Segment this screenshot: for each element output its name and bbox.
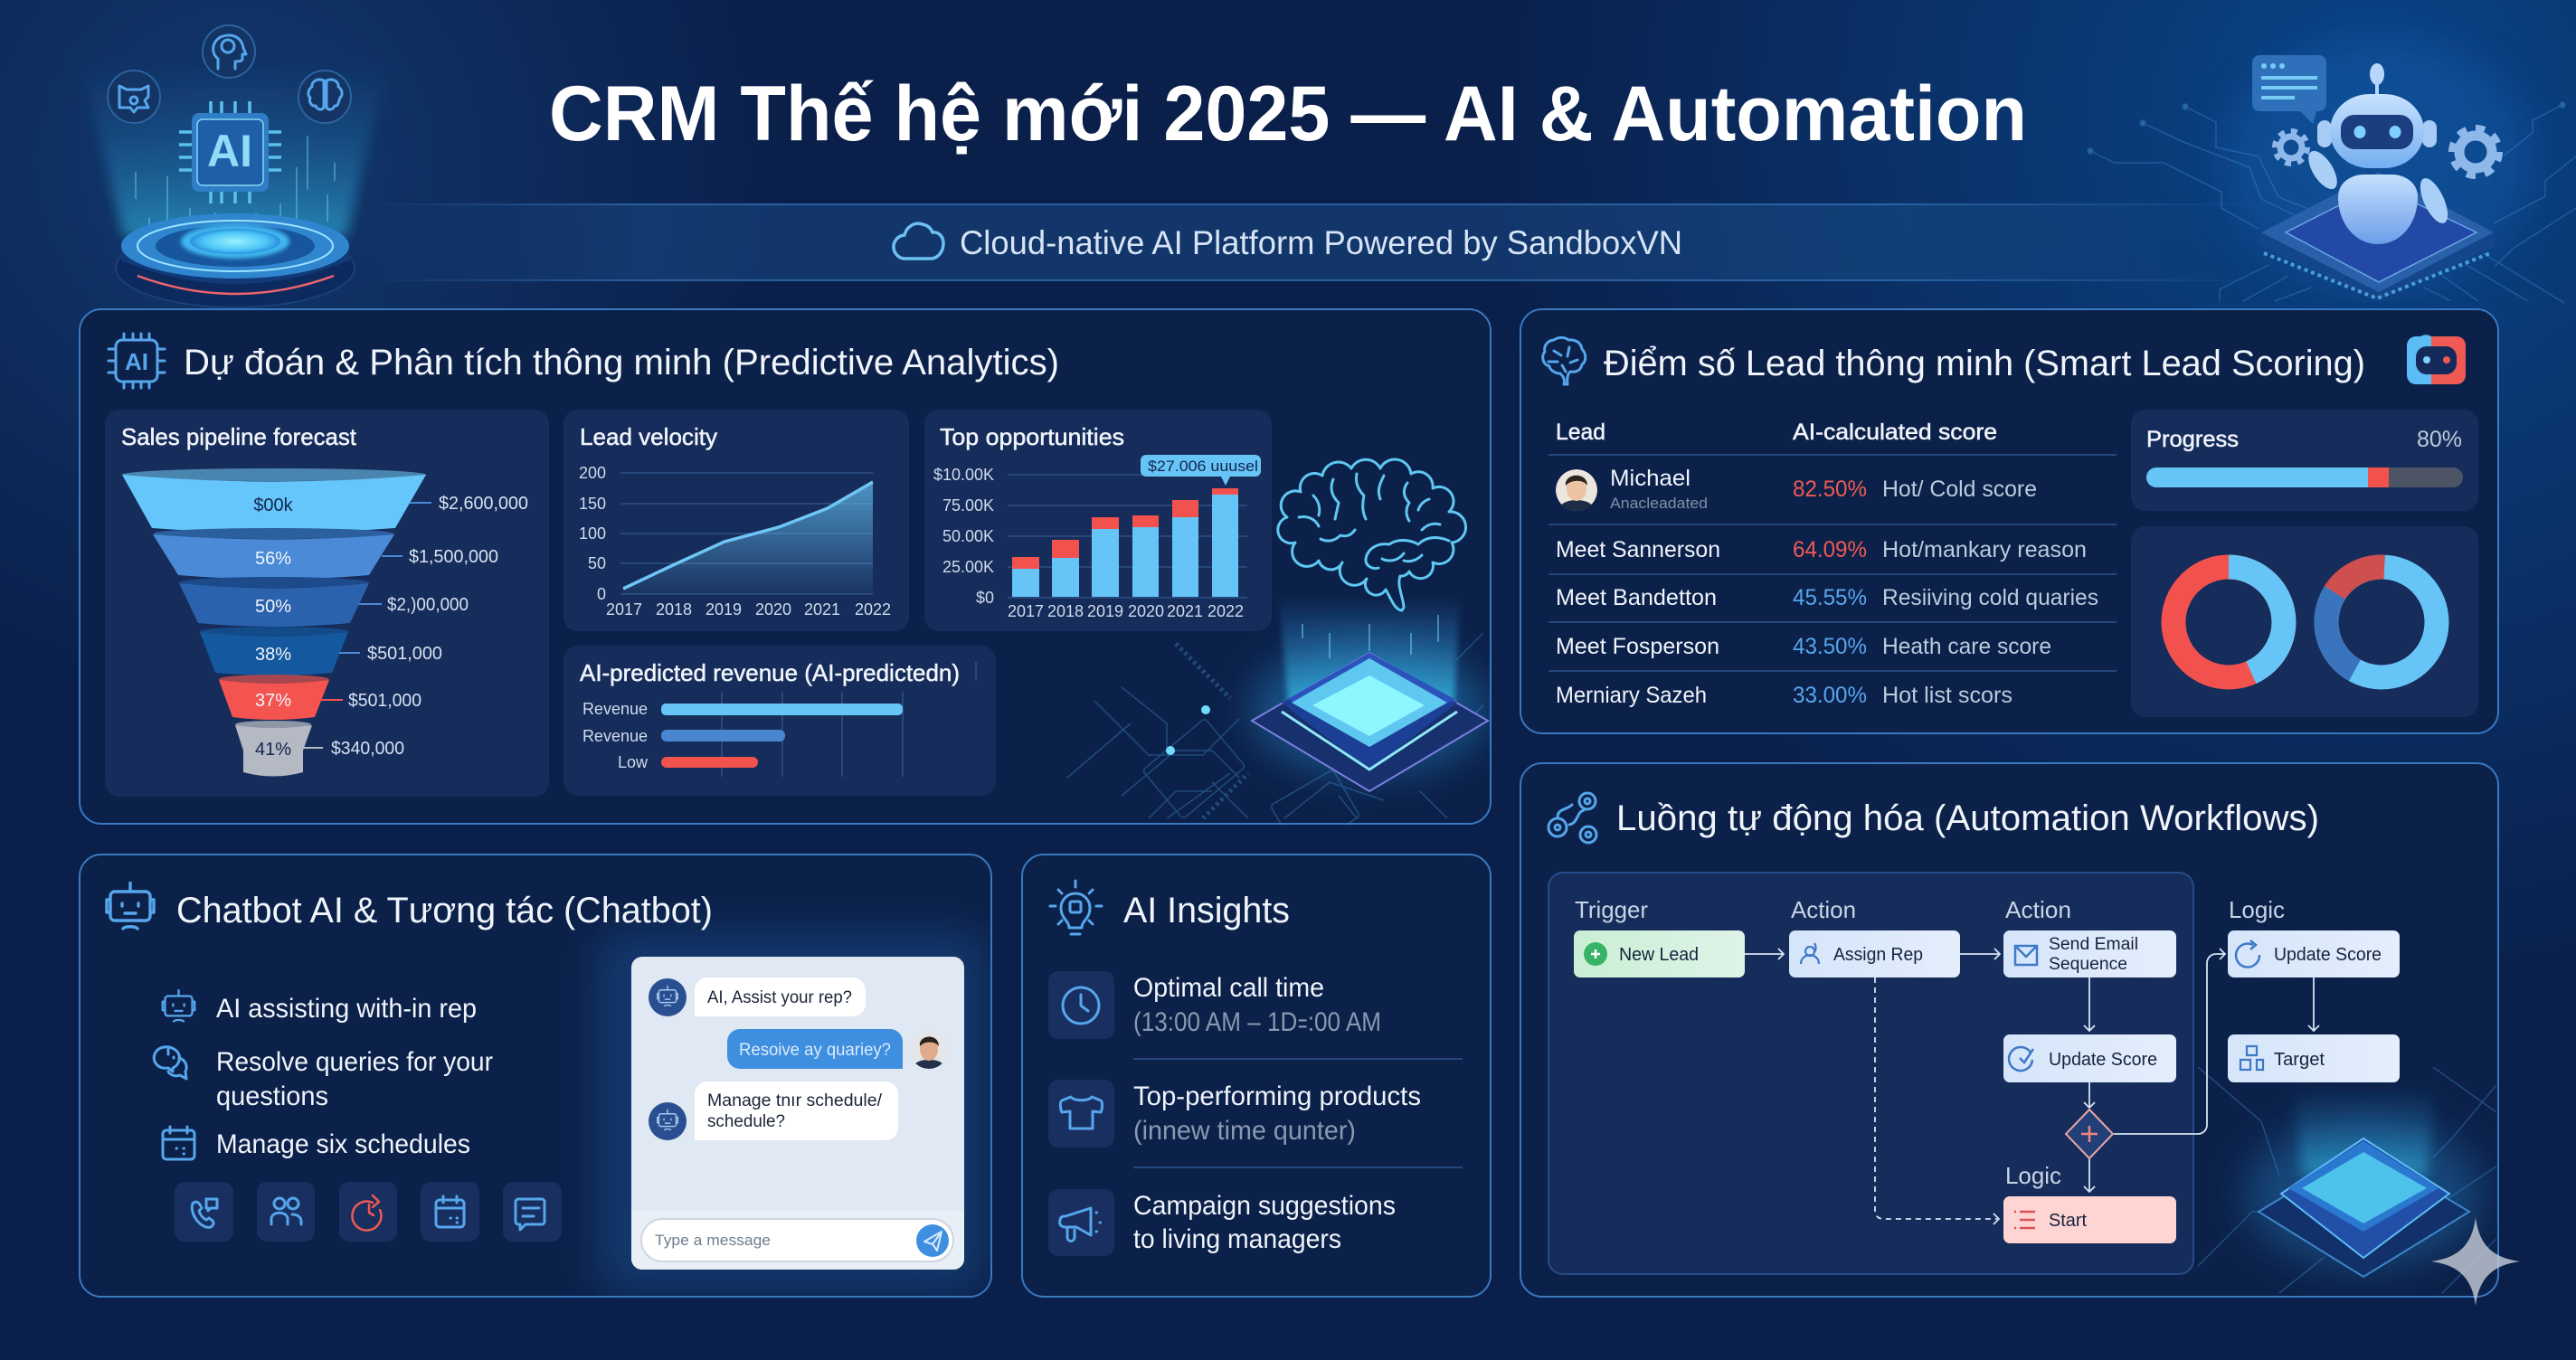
chart: lead velocity: 100 xyxy=(579,524,606,543)
node: send email sequence xyxy=(2003,930,2176,978)
illustration: AI chip hologram xyxy=(81,25,387,307)
node: update score: Update Score xyxy=(2049,1050,2157,1070)
progress card: 80% xyxy=(2417,427,2462,452)
insight: optimal call time: Optimal call time xyxy=(1133,973,1324,1003)
chart: top opportunities: $10.00K xyxy=(933,466,994,484)
heading xyxy=(1050,881,1290,934)
progress card: Progress xyxy=(2146,427,2239,452)
chart: sales pipeline funnel: 50% xyxy=(255,597,291,617)
avatar xyxy=(1556,469,1597,512)
decision diamond xyxy=(2066,1110,2113,1158)
chart: sales pipeline funnel: $340,000 xyxy=(331,739,404,759)
table: lead scores: Meet Fosperson xyxy=(1556,634,1719,659)
feature list: questions xyxy=(216,1081,328,1111)
chart: top opportunities: 2022 xyxy=(1208,602,1244,620)
platform base xyxy=(116,213,355,307)
heading: AI Insights xyxy=(1123,891,1290,930)
subtitle: Cloud-native AI Platform Powered by SandboxVN xyxy=(960,224,1682,261)
insight: campaign suggestions: Campaign suggestions xyxy=(1133,1191,1396,1221)
table: lead scores: Anacleadated xyxy=(1610,495,1708,512)
chart: sales pipeline funnel: 56% xyxy=(255,549,291,569)
table: lead scores: Meet Bandetton xyxy=(1556,585,1717,610)
icon: gears xyxy=(1548,793,1596,843)
node: assign rep xyxy=(1789,930,1960,978)
icon: cloud xyxy=(894,223,943,259)
table: lead scores: Hot/ Cold score xyxy=(1882,477,2037,502)
chart: lead velocity: 2022 xyxy=(855,600,891,619)
donut charts xyxy=(2131,526,2478,717)
node: new lead xyxy=(1574,930,1745,978)
chart: top opportunities: 50.00K xyxy=(942,527,994,545)
node: target: Target xyxy=(2274,1050,2325,1070)
table: lead scores xyxy=(1548,420,2117,708)
table: lead scores: Merniary Sazeh xyxy=(1556,683,1707,708)
chart: AI-predicted revenue xyxy=(564,646,996,796)
chart: sales pipeline funnel xyxy=(105,410,549,797)
node: start: Start xyxy=(2049,1211,2087,1231)
chart: sales pipeline funnel: $501,000 xyxy=(367,644,442,664)
chart: lead velocity: 2020 xyxy=(755,600,791,619)
table: lead scores: 45.55% xyxy=(1793,585,1867,610)
flow diagram: Action xyxy=(2005,896,2071,923)
icon row xyxy=(175,1182,562,1242)
chart: lead velocity: 0 xyxy=(597,585,606,603)
table: lead scores: Resiiving cold quaries xyxy=(1882,585,2098,610)
feature list xyxy=(154,990,493,1159)
chart: top opportunities: 25.00K xyxy=(942,558,994,576)
node: assign rep: Assign Rep xyxy=(1833,945,1923,965)
node: send email sequence: Send Email xyxy=(2049,935,2138,954)
workflow canvas xyxy=(1548,873,2193,1274)
table: lead scores: Hot list scors xyxy=(1882,683,2012,708)
heading: Dự đoán & Phân tích thông minh (Predictive Analytics) xyxy=(184,343,1059,382)
feature list: Manage six schedules xyxy=(216,1129,470,1159)
chart: sales pipeline funnel: $1,500,000 xyxy=(409,547,498,567)
insight: top-performing products: Top-performing products xyxy=(1133,1081,1421,1111)
bot message: schedule? xyxy=(707,1112,785,1131)
table: lead scores: Heath care score xyxy=(1882,634,2051,659)
chart: lead velocity xyxy=(564,410,909,631)
flow diagram: Action xyxy=(1791,896,1856,923)
chart: AI-predicted revenue: Revenue xyxy=(582,727,648,745)
chart: lead velocity: 200 xyxy=(579,464,606,482)
table: lead scores: AI-calculated score xyxy=(1793,420,1997,445)
icon: AI chip: AI xyxy=(125,348,148,375)
chart: top opportunities: Top opportunities xyxy=(940,423,1124,450)
chart: top opportunities: 75.00K xyxy=(942,496,994,515)
donut: right xyxy=(2326,567,2437,677)
icon: head badge xyxy=(203,25,255,78)
icon: light bulb xyxy=(1050,881,1102,934)
node: update score logic xyxy=(2228,930,2400,978)
table: lead scores: 33.00% xyxy=(1793,683,1867,708)
chart: lead velocity: Lead velocity xyxy=(580,423,717,450)
donut: left xyxy=(2174,567,2284,677)
title: CRM Thế hệ mới 2025 — AI & Automation xyxy=(549,71,2027,157)
heading: Điểm số Lead thông minh (Smart Lead Scoring) xyxy=(1604,344,2365,383)
table: lead scores: Hot/mankary reason xyxy=(1882,537,2087,562)
circuit traces xyxy=(2088,102,2576,303)
user message: Resoive ay quariey? xyxy=(739,1041,891,1060)
chart: top opportunities: 2020 xyxy=(1128,602,1164,620)
icon: brain xyxy=(1543,337,1586,384)
icon: sparkle watermark xyxy=(2431,1217,2520,1306)
arrows xyxy=(1745,949,2319,1224)
chart: top opportunities: 2021 xyxy=(1167,602,1203,620)
bot message xyxy=(649,1081,898,1140)
table: lead scores: 64.09% xyxy=(1793,537,1867,562)
table: lead scores: 82.50% xyxy=(1793,477,1867,502)
chart: lead velocity: 2018 xyxy=(656,600,692,619)
icon: question bubbles xyxy=(154,1047,186,1079)
insight: campaign suggestions xyxy=(1048,1189,1396,1256)
insight: campaign suggestions: to living managers xyxy=(1133,1224,1341,1254)
chart: sales pipeline funnel: $2,)00,000 xyxy=(387,595,469,615)
insight: top-performing products xyxy=(1048,1080,1421,1148)
icon: calendar xyxy=(163,1127,194,1159)
heading: Luồng tự động hóa (Automation Workflows) xyxy=(1616,798,2319,838)
chart: lead velocity: 2019 xyxy=(706,600,742,619)
bot message: Manage tnır schedule/ xyxy=(707,1091,883,1110)
flow diagram: Trigger xyxy=(1575,896,1648,923)
node: send email sequence: Sequence xyxy=(2049,955,2127,974)
user message xyxy=(727,1029,948,1071)
icon: two-tone robot xyxy=(2407,335,2466,384)
insight: top-performing products: (innew time qunter) xyxy=(1133,1116,1356,1146)
chart: top opportunities xyxy=(924,410,1272,631)
chart: AI-predicted revenue: Revenue xyxy=(582,700,648,718)
table: lead scores: Lead xyxy=(1556,420,1605,445)
gears xyxy=(2276,129,2498,175)
heading xyxy=(1543,335,2466,384)
progress card xyxy=(2131,410,2478,511)
node: start xyxy=(2003,1196,2176,1243)
table: lead scores: Michael xyxy=(1610,466,1690,491)
subtitle band xyxy=(362,203,2279,281)
illustration: workflow chip xyxy=(2198,1067,2496,1293)
chat window xyxy=(631,957,964,1270)
chip platform xyxy=(2261,172,2494,300)
chart: lead velocity: 50 xyxy=(588,554,606,572)
chart: sales pipeline funnel: $501,000 xyxy=(348,691,421,711)
chart: lead velocity: 2021 xyxy=(804,600,840,619)
heading: Chatbot AI & Tương tác (Chatbot) xyxy=(176,891,713,930)
insight: optimal call time: (13:00 AM – 1D꞊:00 AM xyxy=(1133,1007,1381,1037)
table: lead scores: Meet Sannerson xyxy=(1556,537,1720,562)
robot xyxy=(2303,63,2453,244)
illustration: brain over glowing chip xyxy=(1067,459,1488,853)
heading xyxy=(109,334,1059,388)
node: new lead: New Lead xyxy=(1619,945,1699,965)
AI chip xyxy=(179,101,281,203)
flow diagram: Logic xyxy=(2229,896,2285,923)
node: update score logic: Update Score xyxy=(2274,945,2382,965)
chart: sales pipeline funnel: 41% xyxy=(255,740,291,760)
chart: AI-predicted revenue: Low xyxy=(618,753,649,771)
node: target xyxy=(2228,1034,2400,1082)
brain xyxy=(1278,459,1466,610)
node: update score xyxy=(2003,1034,2176,1082)
callout: $27.006 uuusel xyxy=(1148,458,1258,475)
chart: AI-predicted revenue: AI-predicted revenue (AI-predictedn) xyxy=(580,659,960,686)
panel: smart lead scoring xyxy=(1520,309,2498,733)
panel: chatbot xyxy=(80,855,991,1297)
chart: lead velocity: 150 xyxy=(579,495,606,513)
chart: top opportunities: 2018 xyxy=(1047,602,1084,620)
chart: top opportunities: 2017 xyxy=(1008,602,1044,620)
chart: sales pipeline funnel: 38% xyxy=(255,645,291,665)
message input: Type a message xyxy=(655,1232,771,1249)
chart: top opportunities: 2019 xyxy=(1087,602,1123,620)
panel: AI insights xyxy=(1022,855,1491,1297)
message input xyxy=(641,1219,953,1261)
bot message: AI, Assist your rep? xyxy=(707,988,852,1007)
icon: robot xyxy=(107,883,154,929)
illustration: robot on circuit platform xyxy=(2088,36,2576,303)
icon: AI chip xyxy=(109,334,165,388)
AI chip: AI xyxy=(207,126,252,176)
flow diagram xyxy=(1574,896,2400,1243)
panel: automation workflows xyxy=(1520,763,2498,1297)
chart: top opportunities: $0 xyxy=(976,589,994,607)
chart: sales pipeline funnel: $00k xyxy=(253,496,294,515)
icon: brain badge xyxy=(298,71,351,123)
chart: sales pipeline funnel: Sales pipeline forecast xyxy=(121,423,357,450)
chart: sales pipeline funnel: 37% xyxy=(255,691,291,711)
bot message xyxy=(649,978,866,1016)
feature list: Resolve queries for your xyxy=(216,1047,493,1077)
icon: network badge xyxy=(108,71,160,123)
speech bubble xyxy=(2252,55,2326,124)
feature list: AI assisting with-in rep xyxy=(216,994,477,1024)
chart: lead velocity: 2017 xyxy=(606,600,642,619)
insight: optimal call time xyxy=(1048,971,1381,1039)
callout xyxy=(1141,455,1261,486)
panel: predictive analytics xyxy=(80,309,1491,853)
chart: sales pipeline funnel: $2,600,000 xyxy=(439,494,528,514)
table: lead scores: 43.50% xyxy=(1793,634,1867,659)
flow diagram: Logic xyxy=(2005,1162,2061,1189)
